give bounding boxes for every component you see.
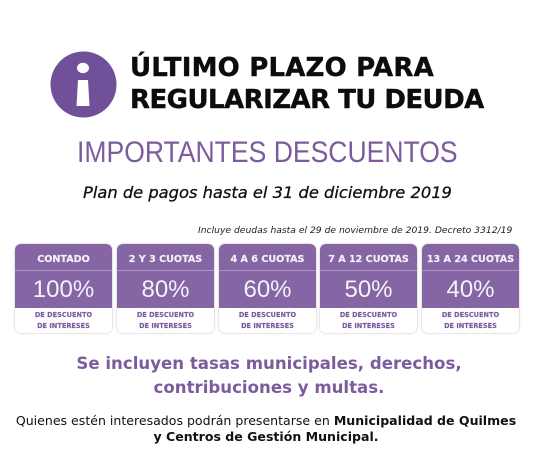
- heading: importantes descuentos: IMPORTANTES DESCUENTOS: [77, 136, 458, 169]
- subheading: plan de pagos: Plan de pagos hasta el 31 de diciembre 2019: [83, 183, 452, 202]
- statement: tasas incluidas: Se incluyen tasas municipales, derechos,: [76, 354, 462, 373]
- statement: tasas incluidas: contribuciones y multas.: [154, 378, 384, 396]
- card: contado: [15, 244, 112, 333]
- footer text: [16, 413, 516, 444]
- card: 13 a 24 cuotas: 40%: [446, 276, 495, 303]
- statement: tasas incluidas: [76, 354, 462, 396]
- card: 13 a 24 cuotas: 13 A 24 CUOTAS: [427, 254, 514, 265]
- card: 7 a 12 cuotas: 50%: [344, 276, 393, 303]
- card: 7 a 12 cuotas: [320, 244, 417, 333]
- card: 7 a 12 cuotas: DE DESCUENTO: [340, 311, 397, 319]
- card: 13 a 24 cuotas: DE DESCUENTO: [442, 311, 499, 319]
- card: 2 y 3 cuotas: [117, 244, 214, 333]
- card: 7 a 12 cuotas: 7 A 12 CUOTAS: [328, 254, 409, 265]
- card: 2 y 3 cuotas: 2 Y 3 CUOTAS: [129, 254, 202, 265]
- card: 4 a 6 cuotas: 4 A 6 CUOTAS: [231, 254, 304, 265]
- note: decreto: Incluye deudas hasta el 29 de noviembre de 2019. Decreto 3312/19: [198, 225, 512, 236]
- card: contado: DE INTERESES: [37, 322, 90, 330]
- icon: info circle: [50, 52, 116, 118]
- card: contado: DE DESCUENTO: [35, 311, 92, 319]
- title: REGULARIZAR TU DEUDA: [130, 85, 484, 115]
- card: contado: 100%: [33, 276, 94, 303]
- card: 4 a 6 cuotas: 60%: [243, 276, 292, 303]
- card: 13 a 24 cuotas: DE INTERESES: [444, 322, 497, 330]
- title: ÚLTIMO PLAZO PARA: [130, 53, 434, 83]
- card: 2 y 3 cuotas: DE INTERESES: [139, 322, 192, 330]
- card: 2 y 3 cuotas: DE DESCUENTO: [137, 311, 194, 319]
- footer text: Quienes estén interesados podrán presentarse en Municipalidad de Quilmes: [16, 413, 516, 428]
- card: 13 a 24 cuotas: [422, 244, 519, 333]
- card: 4 a 6 cuotas: DE DESCUENTO: [239, 311, 296, 319]
- card: 4 a 6 cuotas: [219, 244, 316, 333]
- card: 4 a 6 cuotas: DE INTERESES: [241, 322, 294, 330]
- footer text: y Centros de Gestión Municipal.: [153, 429, 379, 444]
- card: contado: CONTADO: [37, 254, 90, 265]
- card: 7 a 12 cuotas: DE INTERESES: [342, 322, 395, 330]
- card: 2 y 3 cuotas: 80%: [141, 276, 190, 303]
- title: [130, 52, 484, 115]
